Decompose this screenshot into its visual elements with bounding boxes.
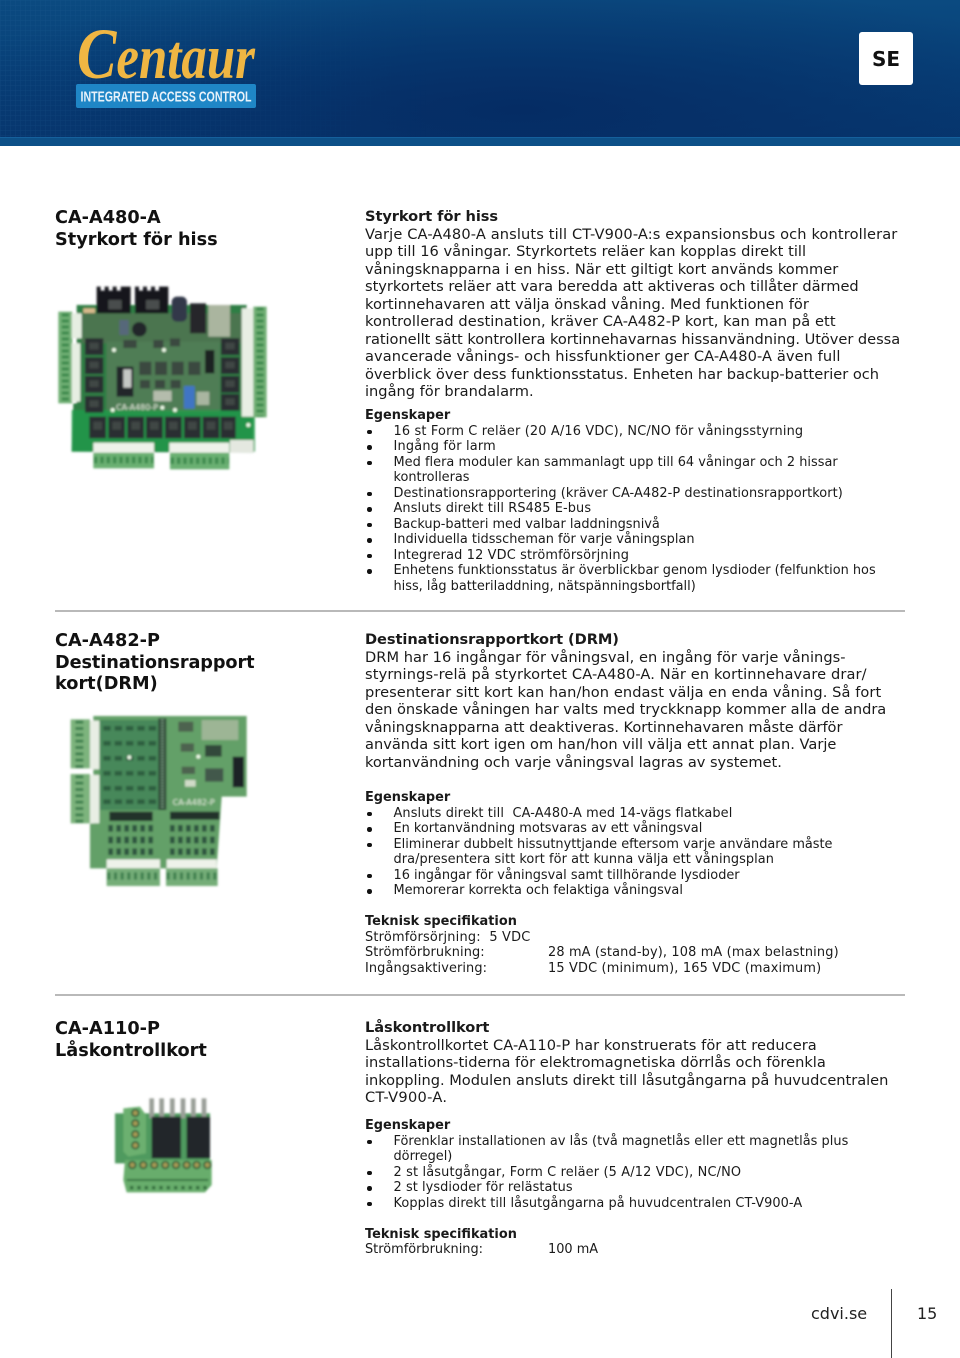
section 3 heading: Låskontrollkort xyxy=(55,1040,207,1060)
section 1 description: kontrollerad destination, kräver CA-A482-P kort, kan man på ett xyxy=(365,313,836,330)
section 3 features list: dörregel) xyxy=(394,1149,452,1164)
section 3 heading: CA-A110-P xyxy=(55,1019,160,1039)
section 1 features list: Individuella tidsscheman för varje våningsplan xyxy=(394,532,694,547)
section 1 description xyxy=(365,208,900,400)
section 1 description: överblick över dess funktionsstatus. Enheten har backup-batterier och xyxy=(365,366,879,382)
section 2 technical specification xyxy=(365,914,839,976)
section 2 technical specification: Strömförsörjning: 5 VDC xyxy=(365,930,530,944)
section 1 features list: Enhetens funktionsstatus är överblickbar genom lysdioder (felfunktion hos xyxy=(394,563,876,578)
section 3 features heading: Egenskaper xyxy=(365,1118,450,1133)
section 2 heading: CA-A482-P xyxy=(55,631,160,651)
section 2 features list: En kortanvändning motsvaras av ett våningsval xyxy=(394,821,702,836)
section 1 features list: 16 st Form C reläer (20 A/16 VDC), NC/NO för våningsstyrning xyxy=(394,424,803,438)
section 1 features list: hiss, låg batteriladdning, nätspänningsbortfall) xyxy=(394,578,696,594)
product photo: CA-A480-A board: CA-A480-P xyxy=(116,403,158,412)
section 1 description: Styrkort för hiss xyxy=(365,208,498,225)
section 3 technical specification: Teknisk specifikation xyxy=(365,1226,517,1242)
header grid texture xyxy=(0,25,91,137)
section 3 description: inkoppling. Modulen ansluts direkt till låsutgångarna på huvudcentralen xyxy=(365,1072,888,1088)
section 2 description: presenterar sitt kort kan han/hon endast välja en enda våning. Så fort xyxy=(365,684,881,700)
header lower band xyxy=(0,137,960,146)
section 1 description: styrkortets reläer att vara beredda att aktiveras och tillåter därmed xyxy=(365,278,859,295)
section 3 description: Låskontrollkort xyxy=(365,1019,489,1036)
header banner xyxy=(0,0,960,146)
section 2 features list: Eliminerar dubbelt hissutnyttjande eftersom varje användare måste xyxy=(394,836,832,852)
section 2 description: DRM har 16 ingångar för våningsval, en ingång för varje vånings- xyxy=(365,648,846,666)
footer website: cdvi.se xyxy=(811,1304,867,1323)
section 2 technical specification: 15 VDC (minimum), 165 VDC (maximum) xyxy=(548,960,821,976)
section 2 description: använda sitt kort igen om han/hon vill välja ett annat plan. Varje xyxy=(365,736,836,753)
section 3 description: Låskontrollkortet CA-A110-P har konstruerats för att reducera xyxy=(365,1036,817,1054)
section 2 heading: Destinationsrapport xyxy=(55,652,254,672)
section 2 description: Destinationsrapportkort (DRM) xyxy=(365,631,619,648)
section 1 description: kortinnehavaren att välja önskad våning. Med funktionen för xyxy=(365,296,809,312)
language badge xyxy=(859,32,913,85)
section 3 description: CT-V900-A. xyxy=(365,1089,447,1106)
section 2 technical specification: Teknisk specifikation xyxy=(365,914,517,929)
product photo: CA-A482-P board xyxy=(69,714,248,888)
section 2 features heading: Egenskaper xyxy=(365,790,450,805)
section 1 heading: CA-A480-A xyxy=(55,208,161,228)
section 2 features list: Memorerar korrekta och felaktiga våningsval xyxy=(394,883,683,898)
section 2 description: kortanvändning och varje våningsval lagras av systemet. xyxy=(365,754,782,770)
section 2 heading: kort(DRM) xyxy=(55,674,158,694)
section 3 features list: 2 st lysdioder för relästatus xyxy=(394,1180,573,1195)
footer page number: 15 xyxy=(917,1304,937,1323)
section 3 heading xyxy=(55,1019,207,1060)
section 2 technical specification: Strömförbrukning: xyxy=(365,945,485,960)
section 3 features list: Kopplas direkt till låsutgångarna på huvudcentralen CT-V900-A xyxy=(394,1196,802,1210)
section 1 description: upp till 16 våningar. Styrkortets reläer kan kopplas direkt till xyxy=(365,243,806,260)
section 3 features list: 2 st låsutgångar, Form C reläer (5 A/12 VDC), NC/NO xyxy=(394,1164,741,1180)
section 1 features list: kontrolleras xyxy=(394,470,470,485)
section 3 technical specification: Strömförbrukning: xyxy=(365,1242,483,1257)
section 2 features list: Ansluts direkt till CA-A480-A med 14-vägs flatkabel xyxy=(394,806,732,820)
product photo: CA-A480-A board xyxy=(56,284,268,471)
section 1 features list: Integrerad 12 VDC strömförsörjning xyxy=(394,548,629,562)
section 3 technical specification xyxy=(365,1226,598,1257)
section 1 features heading: Egenskaper xyxy=(365,408,450,423)
section 1 features list: Med flera moduler kan sammanlagt upp till 64 våningar och 2 hissar xyxy=(394,454,838,470)
section 1 heading xyxy=(55,208,218,250)
section 2 description: den önskade våningen har valts med tryckknapp kommer alla de andra xyxy=(365,701,886,718)
section 2 technical specification: 28 mA (stand-by), 108 mA (max belastning) xyxy=(548,945,839,960)
section 2 features list: 16 ingångar för våningsval samt tillhörande lysdioder xyxy=(394,868,740,882)
logo tagline box xyxy=(76,84,256,108)
section 1 description: avancerade vånings- och hissfunktioner ger CA-A480-A även full xyxy=(365,348,841,365)
section 1 features list: Destinationsrapportering (kräver CA-A482-P destinationsrapportkort) xyxy=(394,486,843,500)
section 2 features list xyxy=(367,806,832,898)
section 2 description: styrnings-relä på styrkortet CA-A480-A. När en kortinnehavare drar/ xyxy=(365,666,867,683)
section 1 description: Varje CA-A480-A ansluts till CT-V900-A:s expansionsbus och kontrollerar xyxy=(365,226,897,242)
section 2 technical specification: Ingångsaktivering: xyxy=(365,960,487,976)
section 1 features list: Ansluts direkt till RS485 E-bus xyxy=(394,501,591,516)
section 3 features list xyxy=(367,1133,848,1210)
section 3 technical specification: 100 mA xyxy=(548,1242,598,1257)
section 2 description: våningsknapparna att deaktiveras. Kortinnehavaren måste därför xyxy=(365,718,842,736)
section 2 heading xyxy=(55,631,254,694)
section 1 description: ingång för brandalarm. xyxy=(365,383,534,400)
product photo: CA-A110-P module xyxy=(113,1097,214,1194)
section 1 features list xyxy=(367,423,876,594)
section 1 description: rationellt sätt kontrollera kortinnehavarnas hissanvändning. Utöver dessa xyxy=(365,330,900,348)
product photo: CA-A482-P board: CA-A482-P xyxy=(173,798,215,807)
section 1 features list: Ingång för larm xyxy=(394,439,496,454)
section 1 description: våningsknapparna i en hiss. När ett giltigt kort används kommer xyxy=(365,260,838,278)
section 3 description: installations-tiderna för elektromagnetiska dörrlås och förenkla xyxy=(365,1054,826,1071)
section 2 description xyxy=(365,631,886,770)
language badge: SE xyxy=(872,47,900,71)
section 2 features list: dra/presentera sitt kort för att kunna välja ett våningsplan xyxy=(394,852,774,867)
section 1 features list: Backup-batteri med valbar laddningsnivå xyxy=(394,516,660,532)
section 3 description xyxy=(365,1019,888,1106)
section 1 heading: Styrkort för hiss xyxy=(55,230,218,250)
section 3 features list: Förenklar installationen av lås (två magnetlås eller ett magnetlås plus xyxy=(394,1134,848,1148)
logo: Centaur xyxy=(76,22,256,108)
